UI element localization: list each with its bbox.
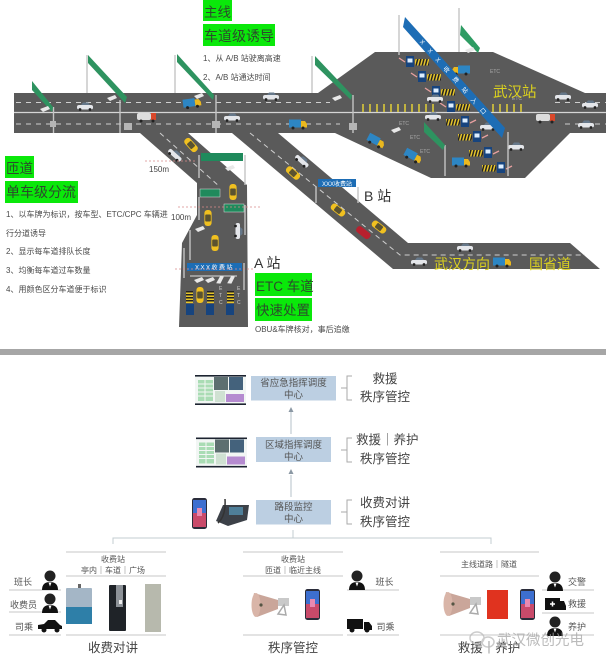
panel: toll intercom: 班长 bbox=[14, 576, 32, 587]
callout: station A: A 站 bbox=[254, 255, 280, 271]
toll booths at station A: C bbox=[237, 300, 241, 306]
section monitoring center bbox=[192, 495, 410, 529]
panel: rescue and maintenance: 救援 bbox=[568, 598, 586, 609]
icon: squad leader bbox=[349, 570, 365, 590]
provincial emergency command center: 省应急指挥调度 bbox=[260, 377, 327, 389]
section monitoring center: 收费对讲 bbox=[360, 495, 410, 510]
callout: main line: 2、A/B 站通达时间 bbox=[203, 72, 271, 82]
provincial emergency command center: 秩序管控 bbox=[360, 389, 410, 404]
road labels: 武汉站 bbox=[493, 84, 536, 101]
toll booths at station A bbox=[186, 274, 241, 315]
sign: station B bbox=[318, 179, 356, 188]
connector tree bbox=[113, 530, 491, 544]
callout: ramp: 2、显示每车道排队长度 bbox=[6, 246, 90, 256]
callout: main line: 主线 bbox=[204, 5, 231, 20]
label: rescue and maintenance: 救援｜养护 bbox=[458, 640, 520, 655]
toll booths at Wuhan station: ETC bbox=[420, 149, 430, 155]
label: order control: 秩序管控 bbox=[268, 640, 318, 655]
section monitoring center: 秩序管控 bbox=[360, 514, 410, 529]
toll booths at station A: C bbox=[219, 300, 223, 306]
panel: toll intercom: 收费员 bbox=[10, 599, 37, 610]
section monitoring center: 中心 bbox=[284, 513, 303, 525]
callout: station A: 快速处置 bbox=[256, 303, 310, 318]
callout: station A bbox=[254, 255, 350, 334]
watermark: 武汉微创光电 bbox=[497, 632, 584, 649]
callout: station A: OBU&车牌核对，事后追缴 bbox=[255, 324, 350, 334]
callout: ramp: 单车级分流 bbox=[6, 184, 76, 200]
arrow: section to regional bbox=[288, 469, 294, 497]
provincial emergency command center: 救援 bbox=[372, 371, 398, 386]
callout: ramp: 1、以车牌为标识，按车型、ETC/CPC 车辆进 bbox=[6, 209, 168, 219]
road labels bbox=[434, 84, 571, 272]
callout: ramp bbox=[5, 156, 168, 294]
regional command center: 救援｜养护 bbox=[356, 432, 419, 447]
icon: mobile phone bbox=[520, 589, 535, 620]
provincial emergency command center bbox=[195, 371, 410, 405]
icon: maintenance worker bbox=[547, 616, 563, 636]
panel: order control bbox=[243, 552, 399, 655]
road markings bbox=[14, 102, 606, 255]
panel: order control: 匝道｜临近主线 bbox=[265, 565, 321, 575]
icon: truck bbox=[347, 619, 372, 632]
panel: rescue and maintenance: 主线道路｜隧道 bbox=[461, 559, 517, 569]
panel: order control: 收费站 bbox=[281, 554, 305, 564]
icon: red emergency box bbox=[487, 590, 508, 619]
panel: toll intercom: 收费站 bbox=[101, 554, 125, 564]
icon: loudspeaker bbox=[444, 592, 481, 616]
panel: toll intercom: 亭内｜车道｜广场 bbox=[81, 565, 145, 575]
icon: ambulance bbox=[545, 598, 566, 610]
road: Wuhan station plaza bbox=[300, 52, 606, 178]
sign: station B: XXX收费站 bbox=[322, 180, 352, 188]
vehicles bbox=[77, 66, 598, 303]
icon: toll collector bbox=[42, 594, 58, 613]
icon: car bbox=[38, 620, 62, 632]
road: main line bbox=[14, 93, 606, 133]
regional command center: 中心 bbox=[284, 451, 303, 463]
callout: ramp: 3、均衡每车道过车数量 bbox=[6, 265, 90, 275]
overhead guidance signs bbox=[32, 8, 508, 290]
panel: rescue and maintenance bbox=[440, 552, 594, 655]
distance marks bbox=[145, 161, 262, 269]
distance marks: 100m bbox=[171, 213, 191, 222]
label: toll intercom: 收费对讲 bbox=[88, 640, 138, 655]
panel: toll intercom bbox=[9, 552, 166, 655]
icon: traffic police bbox=[547, 572, 563, 591]
toll booths at Wuhan station: ETC bbox=[399, 121, 409, 127]
sign: station A gantry: XXX收费站 bbox=[195, 264, 234, 272]
toll booths at Wuhan station bbox=[399, 56, 522, 173]
regional command center bbox=[196, 432, 419, 468]
regional command center: 区域指挥调度 bbox=[265, 439, 322, 451]
callout: station A: ETC 车道 bbox=[256, 278, 314, 294]
toll booths at Wuhan station: ETC bbox=[512, 96, 522, 102]
toll booths at station A: T bbox=[219, 293, 222, 299]
panel: toll intercom: 司乘 bbox=[15, 621, 33, 632]
toll booths at station A: T bbox=[237, 293, 240, 299]
distance marks: 150m bbox=[149, 165, 169, 174]
provincial emergency command center: 中心 bbox=[284, 389, 303, 401]
callout: ramp: 4、用颜色区分车道便于标识 bbox=[6, 284, 106, 294]
road labels: 武汉方向 bbox=[434, 256, 490, 272]
divider band bbox=[0, 349, 606, 355]
arrow: regional to provincial bbox=[288, 407, 294, 434]
road network bbox=[14, 52, 606, 327]
road: ramp to station A bbox=[140, 133, 248, 327]
icon: loudspeaker bbox=[252, 593, 289, 617]
sign: Wuhan station gantry bbox=[403, 17, 505, 138]
callout: ramp: 匝道 bbox=[6, 161, 33, 176]
sign: Wuhan station gantry: XXX收费站入口 bbox=[418, 38, 488, 116]
toll booths at station A: E bbox=[237, 286, 241, 292]
device: wall intercom bbox=[66, 584, 92, 624]
device: intercom column bbox=[109, 585, 126, 631]
device: speaker column bbox=[145, 584, 161, 632]
icon: desk phone bbox=[216, 499, 249, 526]
callout: main line bbox=[203, 0, 281, 82]
icon: mobile phone bbox=[305, 589, 320, 620]
toll booths at station A: E bbox=[219, 286, 223, 292]
road: ramp to station B bbox=[232, 133, 600, 269]
icon: squad leader bbox=[42, 570, 58, 590]
label: station B: B 站 bbox=[364, 188, 391, 204]
regional command center: 秩序管控 bbox=[360, 451, 410, 466]
panel: rescue and maintenance: 养护 bbox=[568, 621, 586, 632]
toll booths at Wuhan station: ETC bbox=[410, 135, 420, 141]
panel: rescue and maintenance: 交警 bbox=[568, 576, 586, 587]
road labels: 国省道 bbox=[529, 256, 571, 272]
toll booths at Wuhan station: ETC bbox=[490, 69, 500, 75]
callout: main line: 车道级诱导 bbox=[204, 28, 274, 44]
callout: ramp: 行分道诱导 bbox=[6, 228, 46, 238]
panel: order control: 班长 bbox=[375, 576, 394, 587]
section monitoring center: 路段监控 bbox=[274, 501, 313, 513]
callout: main line: 1、从 A/B 站驶离高速 bbox=[203, 53, 281, 63]
panel: order control: 司乘 bbox=[376, 621, 395, 632]
sign: station A gantry bbox=[187, 263, 242, 276]
